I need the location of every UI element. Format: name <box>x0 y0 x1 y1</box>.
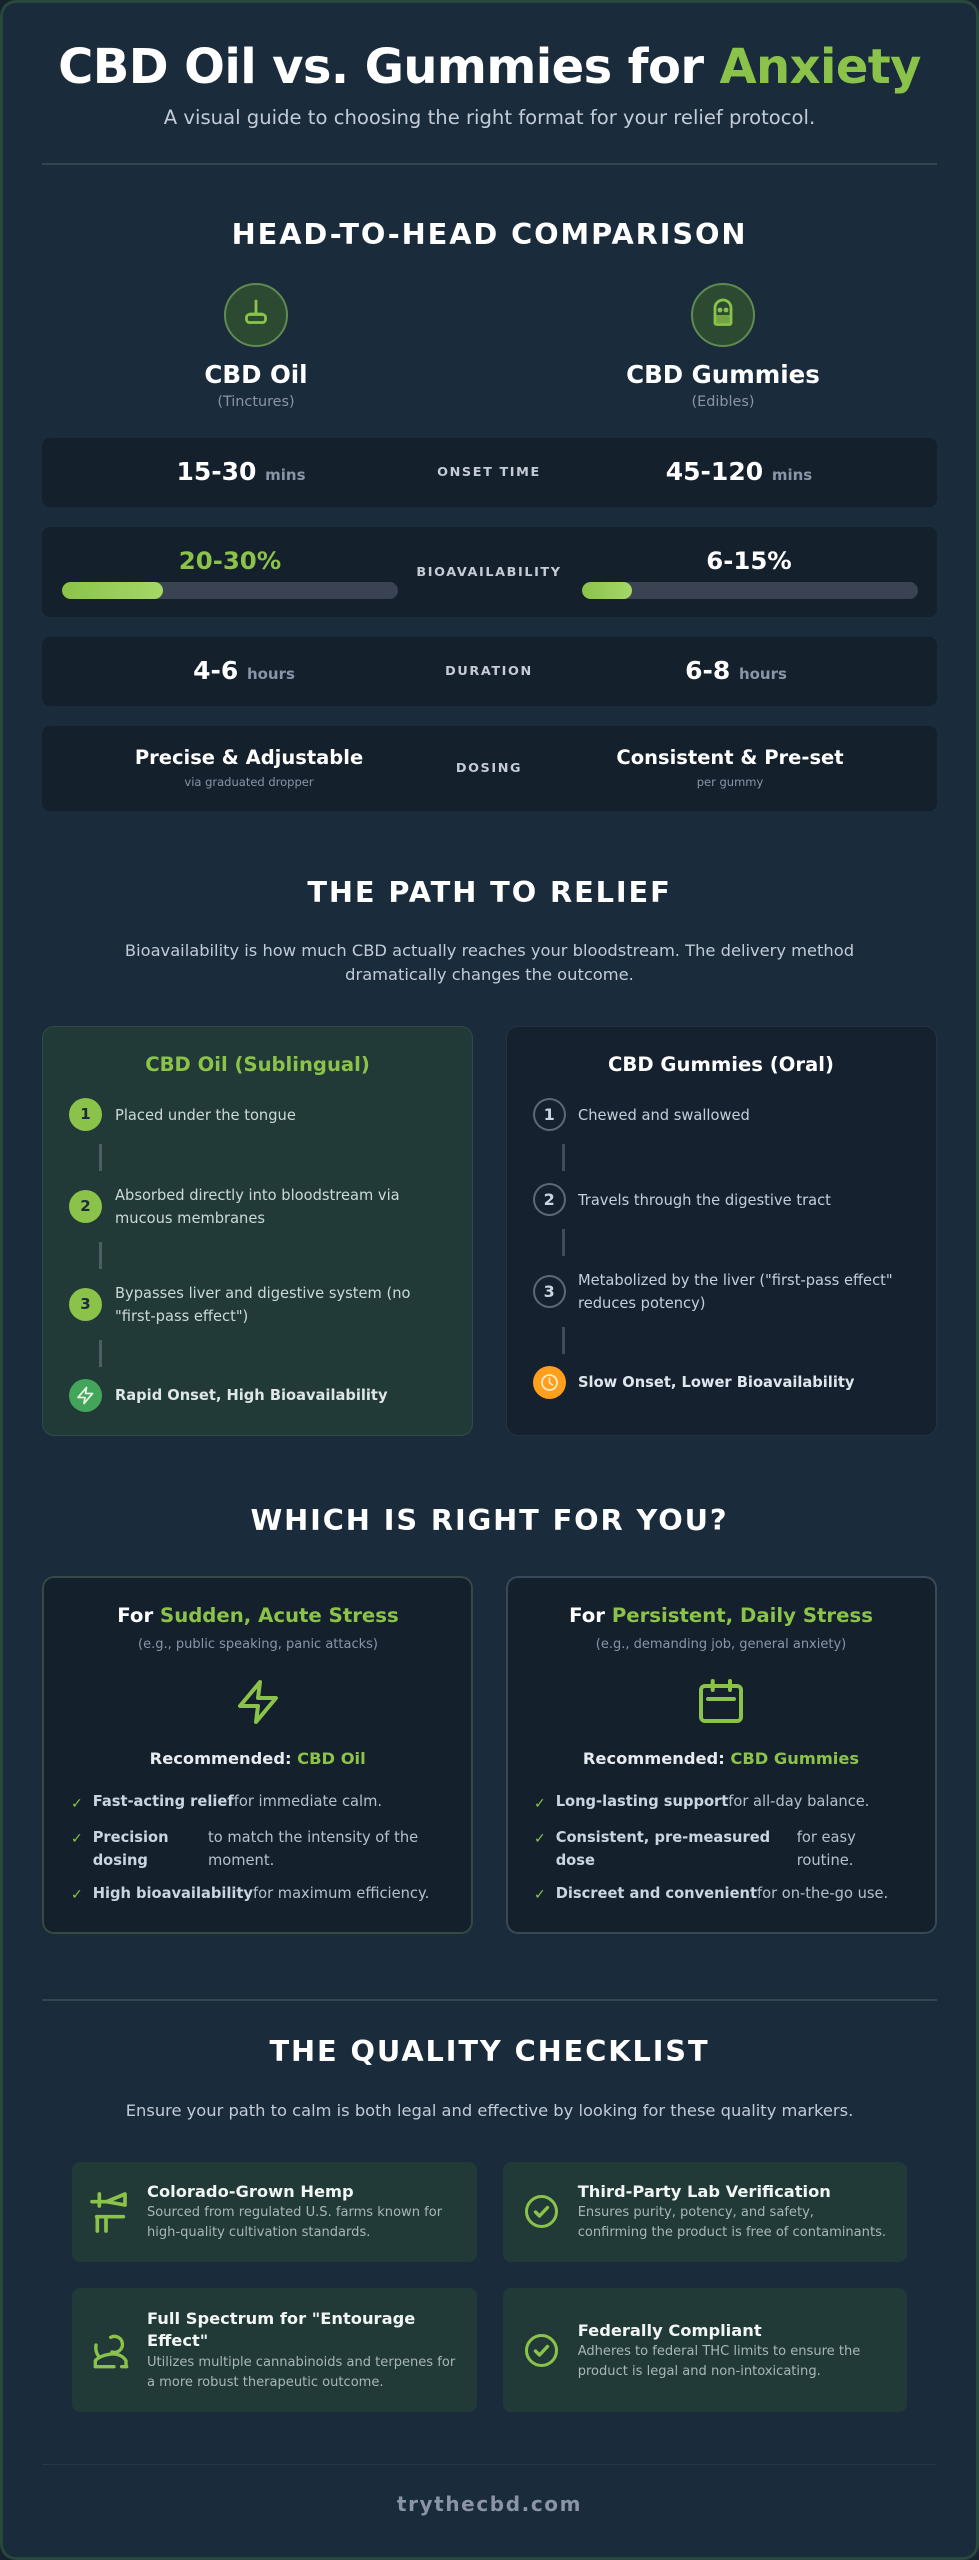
metric label: DOSING <box>456 761 522 776</box>
card: federally compliant <box>503 2288 907 2412</box>
recommendation: Recommended: CBD Oil <box>150 1749 366 1768</box>
icon: entourage <box>94 2334 128 2368</box>
card: third-party lab verification <box>503 2162 907 2262</box>
step 3 <box>533 1274 566 1308</box>
row: bioavailability <box>42 527 937 617</box>
metric label: BIOAVAILABILITY <box>416 565 562 580</box>
check 1: ✓ <box>534 1796 546 1812</box>
benefit 3: Discreet and convenientfor on-the-go use. <box>556 1884 888 1902</box>
intro text: Ensure your path to calm is both legal and effective by looking for these quality markers. <box>126 2101 853 2120</box>
benefit 1: Long-lasting supportfor all-day balance. <box>556 1793 869 1810</box>
step 2 text <box>115 1186 400 1226</box>
icon: gummy bear <box>691 283 755 347</box>
column header: CBD Gummies <box>626 283 820 410</box>
oil bar <box>62 582 398 599</box>
check 2: ✓ <box>534 1831 546 1847</box>
gummies value: 6-15% <box>706 546 792 575</box>
card description: Sourced from regulated U.S. farms known for <box>147 2205 442 2220</box>
recommendation: Recommended: CBD Gummies <box>583 1749 859 1768</box>
example note: (e.g., public speaking, panic attacks) <box>138 1637 378 1652</box>
card description: a more robust therapeutic outcome. <box>147 2375 384 2390</box>
oil value: 4-6 hours <box>193 656 295 685</box>
card title: Colorado-Grown Hemp <box>147 2182 354 2201</box>
icon: calendar <box>699 1679 743 1723</box>
card description: confirming the product is free of contaminants. <box>578 2225 886 2240</box>
card title: Effect" <box>147 2331 208 2350</box>
step 3 text: Bypasses liver and digestive system (no <box>115 1284 410 1302</box>
card title: Federally Compliant <box>578 2321 762 2340</box>
benefit 2 continued: moment. <box>208 1852 274 1868</box>
benefit 2 continued: to match the intensity of the <box>208 1828 418 1846</box>
panel title: For Persistent, Daily Stress <box>569 1604 873 1627</box>
icon: check circle <box>525 2195 558 2228</box>
card description: high-quality cultivation standards. <box>147 2225 370 2240</box>
heading: quality checklist: THE QUALITY CHECKLIST <box>270 2034 710 2068</box>
card description <box>147 2205 442 2240</box>
benefit 2 continued <box>797 1828 856 1868</box>
check 1: ✓ <box>71 1796 83 1812</box>
check 2: ✓ <box>71 1831 83 1847</box>
gummies value: 45-120 mins <box>666 457 812 486</box>
card title: Full Spectrum for "Entourage <box>147 2309 415 2328</box>
check 3: ✓ <box>534 1887 546 1903</box>
result icon: bolt <box>69 1379 102 1412</box>
benefit 2 continued: for easy <box>797 1828 856 1846</box>
step 3: 3 <box>544 1282 555 1300</box>
panel: CBD Oil sublingual path <box>42 1026 473 1436</box>
panel title: For Sudden, Acute Stress <box>117 1604 399 1627</box>
card description: product is legal and non-intoxicating. <box>578 2364 821 2379</box>
gummies note: per gummy <box>697 775 763 789</box>
card description <box>578 2205 886 2240</box>
intro text: Bioavailability is how much CBD actually reaches your bloodstream. The delivery method <box>125 941 854 960</box>
label: CBD Oil <box>204 360 308 389</box>
intro text <box>125 941 854 984</box>
card description <box>147 2355 456 2390</box>
step 2: 2 <box>80 1196 91 1214</box>
step 2 <box>533 1183 566 1216</box>
panel title: CBD Gummies (Oral) <box>608 1053 834 1076</box>
intro text: dramatically changes the outcome. <box>345 965 634 984</box>
benefit 2: dosing <box>93 1852 148 1868</box>
step 2 <box>69 1190 102 1222</box>
oil value: Precise & Adjustable <box>135 746 363 769</box>
icon: bolt <box>238 1680 278 1724</box>
step 1: 1 <box>544 1105 555 1124</box>
label: CBD Gummies <box>626 360 820 389</box>
benefit 3: High bioavailabilityfor maximum efficiency. <box>93 1884 429 1902</box>
card description <box>578 2344 860 2379</box>
step 1 text: Chewed and swallowed <box>578 1107 750 1124</box>
benefit 2 continued <box>208 1828 418 1868</box>
panel title: CBD Oil (Sublingual) <box>145 1053 370 1076</box>
panel: CBD Gummies oral path <box>506 1026 937 1436</box>
sublabel: (Edibles) <box>692 394 754 410</box>
icon: hemp <box>90 2192 127 2233</box>
step 1 <box>533 1098 566 1131</box>
column header: CBD Oil <box>204 283 308 410</box>
benefit 2 <box>556 1828 770 1868</box>
gummies bar <box>582 582 918 599</box>
row: dosing <box>42 726 937 811</box>
gummies value: Consistent & Pre-set <box>616 746 844 769</box>
footer: website: trythecbd.com <box>397 2492 582 2516</box>
check 3: ✓ <box>71 1887 83 1903</box>
step 2 text: Absorbed directly into bloodstream via <box>115 1186 400 1204</box>
benefit 2: Consistent, pre-measured <box>556 1828 770 1846</box>
benefit 2: Precision <box>93 1828 169 1846</box>
step 3 text: "first-pass effect") <box>115 1308 248 1324</box>
step 3 <box>69 1288 102 1320</box>
card description: Utilizes multiple cannabinoids and terpenes for <box>147 2355 455 2370</box>
subtitle: A visual guide to choosing the right format for your relief protocol. <box>164 106 815 129</box>
step 3: 3 <box>80 1294 91 1312</box>
card: full spectrum <box>72 2288 477 2412</box>
oil value: 15-30 mins <box>176 457 306 486</box>
step 3 text <box>578 1272 893 1312</box>
step 1 text: Placed under the tongue <box>115 1107 296 1124</box>
step 2 text: mucous membranes <box>115 1210 265 1226</box>
result icon: clock <box>533 1366 566 1399</box>
icon: dropper <box>224 283 288 347</box>
step 3 text: Metabolized by the liver ("first-pass effect" <box>578 1272 893 1288</box>
benefit 2: dose <box>556 1852 595 1868</box>
sublabel: (Tinctures) <box>217 394 295 410</box>
card description: Adheres to federal THC limits to ensure the <box>578 2344 860 2359</box>
step 2 text: Travels through the digestive tract <box>578 1192 831 1209</box>
step 3 text <box>115 1284 410 1324</box>
benefit 2 continued: routine. <box>797 1852 853 1868</box>
step 1 <box>69 1098 102 1131</box>
heading: path to relief: THE PATH TO RELIEF <box>307 875 672 909</box>
oil note: via graduated dropper <box>184 775 314 789</box>
card description: Ensures purity, potency, and safety, <box>578 2205 814 2220</box>
card title <box>147 2309 415 2350</box>
panel: acute stress <box>42 1576 473 1934</box>
panel: daily stress <box>506 1576 937 1934</box>
metric label: DURATION <box>445 664 533 679</box>
oil value: 20-30% <box>179 546 281 575</box>
card: Colorado-grown hemp <box>72 2162 477 2262</box>
metric label: ONSET TIME <box>437 465 541 480</box>
result text: Rapid Onset, High Bioavailability <box>115 1387 388 1404</box>
benefit 1: Fast-acting relieffor immediate calm. <box>93 1793 382 1810</box>
row: onset time <box>42 438 937 507</box>
benefit 2 <box>93 1828 169 1868</box>
card title: Third-Party Lab Verification <box>578 2182 831 2201</box>
heading: which is right: WHICH IS RIGHT FOR YOU? <box>250 1503 729 1537</box>
example note: (e.g., demanding job, general anxiety) <box>596 1637 846 1652</box>
step 3 text: reduces potency) <box>578 1294 705 1312</box>
icon: check circle <box>525 2334 558 2367</box>
result text: Slow Onset, Lower Bioavailability <box>578 1374 854 1391</box>
title: CBD Oil vs. Gummies for Anxiety <box>58 39 921 95</box>
heading: head-to-head comparison: HEAD-TO-HEAD COMPARISON <box>232 217 747 251</box>
row: duration <box>42 637 937 706</box>
step 1: 1 <box>80 1105 91 1123</box>
step 2: 2 <box>544 1190 555 1209</box>
gummies value: 6-8 hours <box>685 656 787 685</box>
